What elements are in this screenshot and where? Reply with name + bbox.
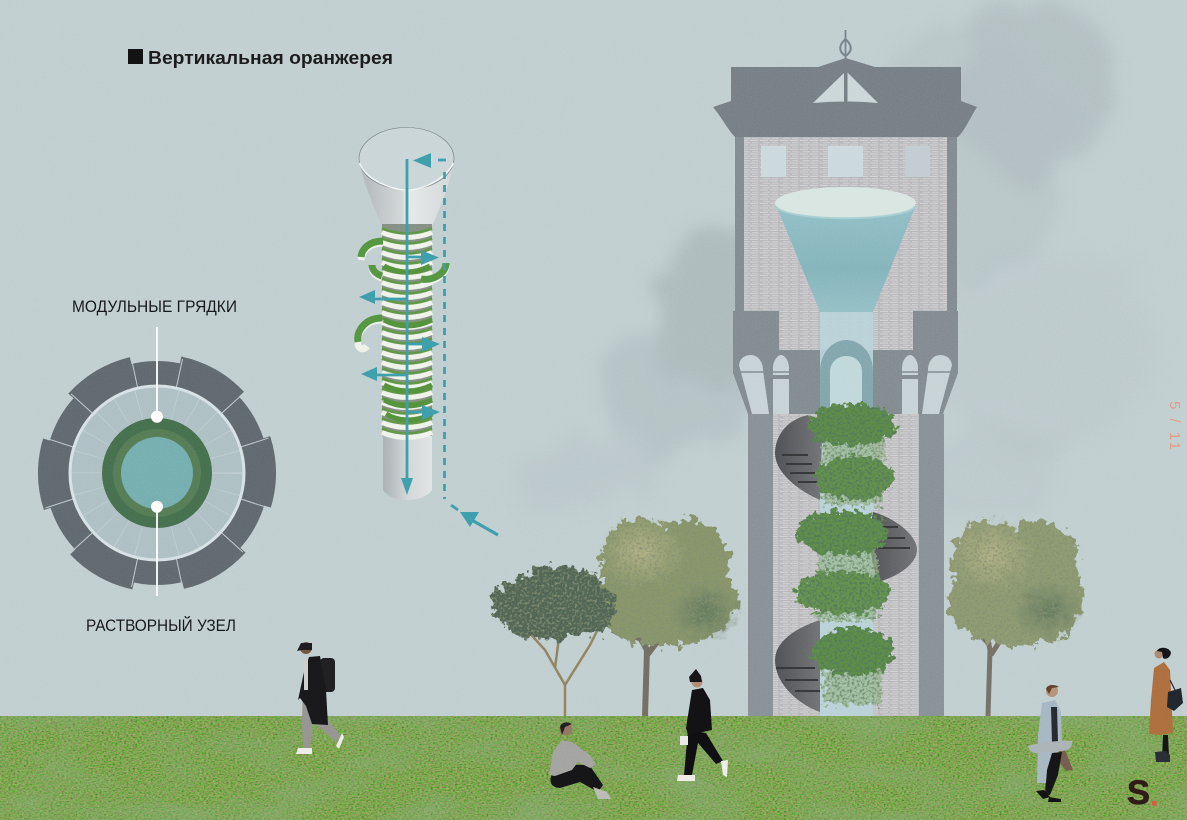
roof window: [813, 70, 878, 103]
planting rings: [382, 224, 432, 437]
label: solution unit: РАСТВОРНЫЙ УЗЕЛ: [86, 616, 236, 635]
water tower: [713, 30, 977, 716]
tower body mass: [733, 137, 958, 414]
outer ring: dark segments: [34, 350, 280, 596]
right arches: [901, 355, 958, 414]
shaft brick wall: [773, 414, 919, 716]
tree: dark small tree: [492, 566, 614, 716]
central water circle: [121, 437, 193, 509]
person: walking figure in black: [677, 669, 728, 781]
hanging plants: [795, 404, 896, 705]
logo: S: [1127, 774, 1150, 812]
person: seated woman: [549, 722, 611, 799]
detached green bed modules: [358, 241, 446, 349]
upper brick wall: [744, 137, 947, 311]
lawn: [0, 716, 1187, 820]
green planting ring: [102, 418, 212, 528]
leader lines and dots: [152, 327, 162, 596]
right pillar: [919, 414, 944, 716]
person: man with skateboard: [1028, 685, 1073, 802]
middle ring: beds: [70, 386, 244, 560]
title: Вертикальная оранжерея: [148, 48, 393, 68]
tree: right olive tree: [947, 517, 1084, 716]
page number: 5 / 11: [1166, 401, 1183, 450]
left arches: [733, 355, 790, 414]
flow arrows: [359, 153, 498, 535]
funnel: [359, 128, 454, 226]
left pillar: [748, 414, 773, 716]
cylinder base: [383, 430, 432, 500]
person: woman in brown coat: [1149, 648, 1183, 762]
windows: [761, 146, 930, 177]
tree: middle olive tree: [594, 516, 741, 716]
finial: [840, 30, 851, 60]
spiral stairs: [775, 415, 917, 712]
water tank funnel: [775, 187, 916, 312]
panel: column flow diagram: [358, 128, 498, 535]
smoke clouds behind tower: [520, 0, 1160, 520]
person: walking man with backpack: [296, 642, 344, 754]
label: modular beds: МОДУЛЬНЫЕ ГРЯДКИ: [72, 298, 237, 316]
roof: [713, 58, 977, 137]
panel: module plan diagram: [34, 298, 280, 635]
water tube: [820, 312, 873, 716]
lower brick wall: [779, 311, 913, 350]
